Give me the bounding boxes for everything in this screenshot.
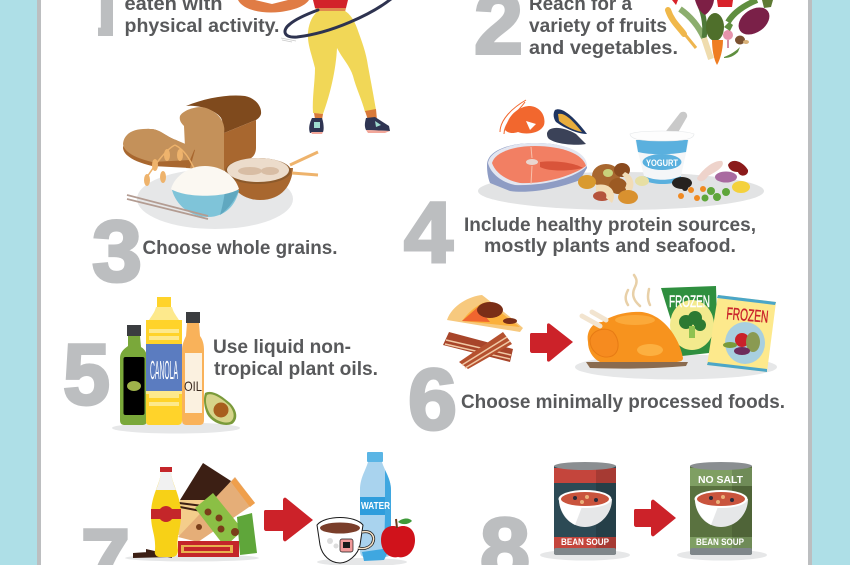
step 3 text: Choose whole grains. [142, 238, 338, 259]
number 5: 5 [63, 327, 110, 423]
step 4 text: Include healthy protein sources, [464, 215, 756, 236]
icon: pizza and bacon [443, 295, 523, 369]
step 1 text [124, 0, 280, 37]
icon: no salt bean soup can [677, 462, 767, 560]
step 2 text: variety of fruits [529, 16, 667, 37]
step 4 text [464, 215, 756, 257]
panel: step 1 physical activity [83, 0, 391, 134]
step 2 text [529, 0, 678, 59]
panel: step 4 healthy protein [404, 100, 764, 281]
arrow [634, 500, 676, 536]
water label: WATER [361, 501, 391, 512]
arrow [264, 498, 313, 541]
step 5 text: tropical plant oils. [214, 359, 378, 380]
icon: oil bottles and avocado [112, 297, 240, 434]
number 6: 6 [408, 352, 457, 448]
yogurt label: YOGURT [646, 158, 678, 168]
step 2 text: and vegetables. [529, 38, 678, 59]
step 4 text: mostly plants and seafood. [484, 236, 736, 257]
step 1 text: physical activity. [124, 16, 280, 37]
frozen label green: FROZEN [669, 292, 710, 311]
yogurt label [642, 154, 682, 170]
no salt label: NO SALT [698, 475, 743, 486]
icon: woman with hula hoop [238, 0, 391, 134]
icon: seafood, nuts, yogurt and beans [478, 100, 764, 210]
panel: step 6 minimally processed foods [408, 275, 785, 448]
panel: step 2 fruits and vegetables [476, 0, 773, 65]
frozen label yellow: FROZEN [726, 304, 769, 327]
panel: step 5 plant oils [63, 297, 378, 434]
oil label: OIL [184, 378, 202, 394]
number 3: 3 [92, 204, 142, 300]
icon: oil bottles and avocado: CANOLA [150, 355, 178, 385]
step 5 text [213, 337, 378, 380]
icon: water, tea and apple [317, 452, 415, 565]
icon: bean soup can [540, 462, 630, 560]
can label: BEAN SOUP [561, 537, 609, 547]
icon: soda and packaged snacks [125, 463, 259, 562]
panel: step 7 snacks swap [81, 452, 415, 565]
step 6 text: Choose minimally processed foods. [461, 392, 785, 413]
number 4: 4 [404, 185, 453, 281]
step 5 text: Use liquid non- [213, 337, 351, 358]
panel: step 8 no salt canned food [480, 462, 767, 565]
icon: roast turkey and frozen vegetables [575, 275, 777, 380]
icon: heart of vegetables [668, 0, 775, 65]
panel: step 3 whole grains [92, 95, 338, 300]
arrow [530, 323, 573, 362]
can label: BEAN SOUP [696, 537, 744, 547]
icon: bread, rice and grains [123, 95, 318, 229]
